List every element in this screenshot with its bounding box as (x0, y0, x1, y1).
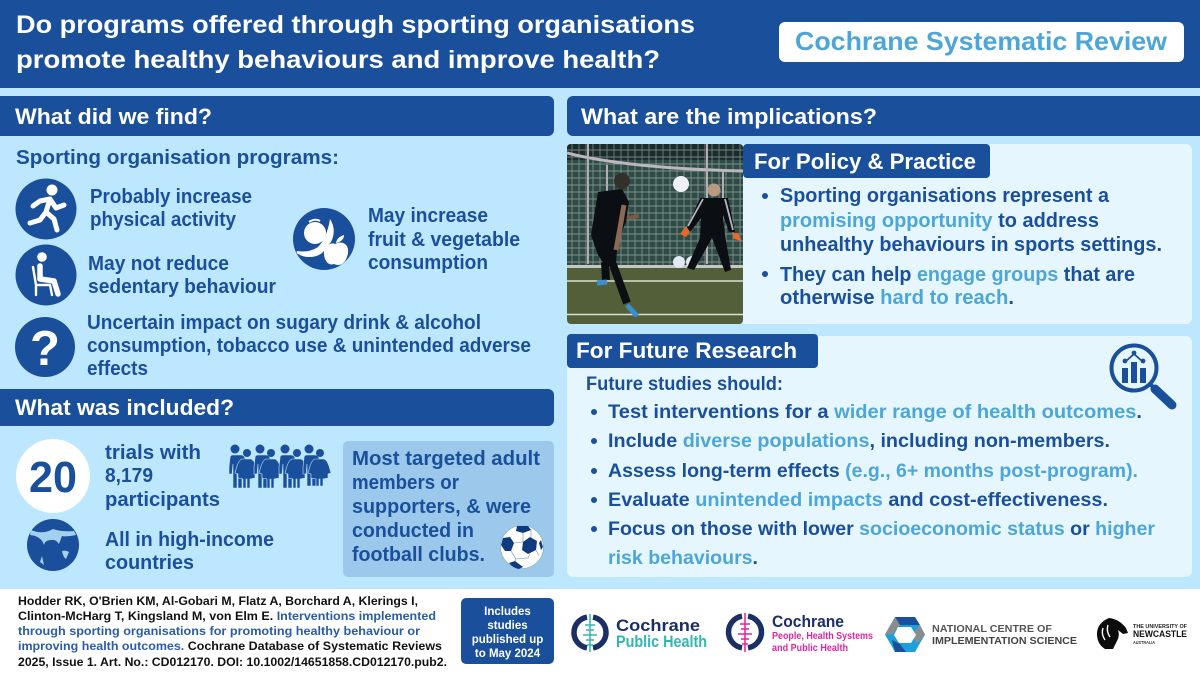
text: fruit and vegetable: consumption (368, 252, 488, 274)
text: sedentary behaviour: sedentary behaviour (88, 276, 276, 298)
heading: for policy and practice: For Policy & Practice (754, 149, 976, 174)
citation: Hodder RK, O'Brien KM, Al-Gobari M, Flatz A, Borchard A, Klerings I, (18, 594, 418, 608)
text: uncertain impact: consumption, tobacco use & unintended adverse (87, 335, 531, 357)
trial count badge (16, 439, 90, 513)
header band (0, 0, 1200, 88)
logo: Cochrane People, Health Systems (729, 612, 873, 654)
text: uncertain impact: Uncertain impact on sugary drink & alcohol (87, 312, 481, 334)
logo: Cochrane People, Health Systems: and Public Health (772, 643, 848, 654)
search date badge: published up (472, 634, 543, 646)
logo: Cochrane People, Health Systems: People, Health Systems (772, 631, 873, 642)
footer band (0, 589, 1200, 675)
logo: Cochrane Public Health: Cochrane (616, 616, 700, 635)
logo: National Centre of Implementation Science (885, 617, 1077, 652)
trial count badge: 20 (29, 453, 77, 502)
text: physical activity: Probably increase (90, 186, 252, 208)
heading: what did we find (0, 96, 554, 136)
heading: what was included (0, 389, 554, 426)
heading: for future research (567, 334, 818, 368)
future bullet five: Focus on those with lower socioeconomic status or higher (608, 519, 1156, 540)
heading: what are the implications: What are the implications? (581, 104, 877, 129)
title: Do programs offered through sporting organisations (16, 11, 695, 39)
citation: Clinton-McHarg T, Kingsland M, von Elm E. Interventions implemented (18, 609, 436, 623)
photo: penalty kick (567, 144, 743, 324)
callout: target population: members or (352, 472, 459, 494)
policy bullet one: unhealthy behaviours in sports settings. (780, 234, 1162, 256)
text: trials and participants (105, 442, 220, 511)
icon: question mark: ? (30, 322, 60, 376)
logo: Cochrane Public Health (574, 614, 707, 652)
icon: group of people (229, 444, 331, 488)
text: trials and participants: trials with (105, 442, 201, 464)
callout: target population: football clubs. (352, 544, 485, 566)
text: fruit and vegetable (368, 205, 520, 274)
icon: running person (16, 178, 76, 240)
text: sedentary behaviour: May not reduce (88, 253, 229, 275)
callout: target population: supporters, & were (352, 496, 531, 518)
text: fruit and vegetable: May increase (368, 205, 488, 227)
icon: globe (27, 519, 79, 571)
policy bullet one: Sporting organisations represent a (780, 185, 1110, 207)
logo: National Centre of Implementation Science: IMPLEMENTATION SCIENCE (932, 635, 1077, 647)
text: uncertain impact: effects (87, 358, 148, 380)
panel: policy and practice (743, 144, 1192, 324)
intro text: Future studies should: (586, 374, 783, 395)
citation: through sporting organisations for promoting healthy behaviour or (18, 624, 420, 638)
logo: National Centre of Implementation Science: NATIONAL CENTRE OF (932, 623, 1053, 635)
panel: included studies (16, 439, 554, 577)
heading: for future research: For Future Research (576, 338, 797, 363)
policy bullet two (762, 264, 1135, 309)
heading: what are the implications (567, 96, 1200, 136)
logo: Cochrane Public Health: Public Health (616, 632, 707, 651)
future bullet four: Evaluate unintended impacts and cost-effectiveness. (608, 490, 1108, 511)
panel: future research (567, 334, 1192, 577)
text: sedentary behaviour (88, 253, 276, 298)
callout: target population (343, 441, 554, 577)
logo: University of Newcastle: NEWCASTLE (1133, 629, 1187, 639)
logo: University of Newcastle: AUSTRALIA (1133, 640, 1156, 645)
text: high-income countries: All in high-income (105, 529, 274, 551)
heading: what was included: What was included? (15, 395, 234, 420)
text: high-income countries: countries (105, 552, 194, 574)
text: trials and participants: participants (105, 489, 220, 511)
icon: football (500, 526, 544, 569)
text: physical activity (90, 186, 252, 231)
heading: what did we find: What did we find? (15, 104, 212, 129)
search date badge (461, 598, 554, 664)
text: trials and participants: 8,179 (105, 465, 153, 487)
logo: University of Newcastle: THE UNIVERSITY OF (1133, 624, 1188, 630)
icon: magnifier with chart (1112, 346, 1172, 405)
citation: improving health outcomes. Cochrane Database of Systematic Reviews (18, 639, 442, 653)
title: promote healthy behaviours and improve health? (16, 46, 660, 74)
future bullet five (591, 519, 1156, 569)
callout: target population: Most targeted adult (352, 448, 540, 470)
policy bullet two: They can help engage groups that are (780, 264, 1135, 286)
citation (18, 594, 447, 669)
future bullet three: Assess long-term effects (e.g., 6+ months post-program). (608, 461, 1138, 482)
findings subheading: Sporting organisation programs: (16, 147, 339, 169)
search date badge: Includes (484, 606, 531, 618)
icon: question mark (15, 317, 75, 377)
icon: seated person (16, 244, 76, 306)
policy bullet one: promising opportunity to address (780, 210, 1099, 232)
citation: 2025, Issue 1. Art. No.: CD012170. DOI: 10.1002/14651858.CD012170.pub2. (18, 655, 447, 669)
text: high-income countries (105, 529, 274, 574)
text: uncertain impact (87, 312, 531, 380)
policy bullet one (762, 185, 1162, 256)
icon: fruit (293, 208, 355, 270)
future bullet one: Test interventions for a wider range of health outcomes . (608, 402, 1142, 423)
title (16, 11, 695, 74)
logo: Cochrane People, Health Systems: Cochrane (772, 612, 844, 631)
review type badge: Cochrane Systematic Review (795, 26, 1168, 56)
panel: findings (15, 147, 531, 380)
heading: for policy and practice (743, 144, 990, 178)
review type badge (779, 22, 1184, 62)
text: physical activity: physical activity (90, 209, 237, 231)
future bullet two: Include diverse populations , including non-members. (608, 431, 1110, 452)
logo: University of Newcastle (1097, 618, 1188, 649)
text: fruit and vegetable: fruit & vegetable (368, 229, 520, 251)
search date badge: to May 2024 (475, 648, 541, 660)
policy bullet two: otherwise hard to reach. (780, 287, 1014, 309)
future bullet five: risk behaviours. (608, 548, 758, 569)
search date badge: studies (487, 620, 528, 632)
callout: target population: conducted in (352, 520, 474, 542)
